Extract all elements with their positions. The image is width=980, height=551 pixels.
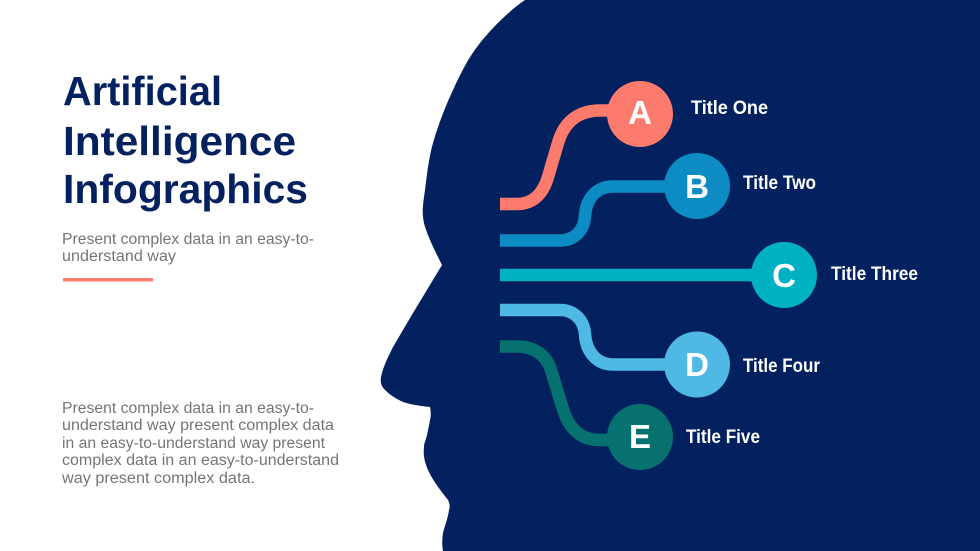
circle B [664,153,730,219]
subtitle text: Present complex data in an easy-to- [62,231,314,248]
body paragraph: understand way present complex data [62,417,334,434]
letter B: B [685,168,709,205]
title: Infographics [63,166,308,212]
accent underline [63,278,153,282]
body paragraph: Present complex data in an easy-to- [62,400,314,417]
letter A: A [628,94,652,131]
connector A [500,110,615,204]
connector D [500,310,675,364]
branch A [500,81,768,204]
label B: Title Two [743,173,816,194]
subtitle text [62,231,314,265]
connector C [500,269,760,281]
body paragraph: way present complex data. [61,470,255,487]
branch E [500,346,760,470]
label C: Title Three [831,264,918,285]
body paragraph [61,400,339,487]
body paragraph: in an easy-to-understand way present [62,435,326,452]
label D: Title Four [743,356,821,377]
letter C: C [772,257,796,294]
letter D: D [685,346,709,383]
title: Intelligence [63,118,296,164]
body paragraph: complex data in an easy-to-understand [62,452,339,469]
subtitle text: understand way [62,248,176,265]
label E: Title Five [686,427,760,448]
circle A [607,81,673,147]
branch D [500,310,821,398]
branch B [500,153,816,240]
head silhouette [381,0,980,551]
letter E: E [629,418,651,455]
connector E [500,346,615,440]
label A: Title One [691,98,768,119]
branch C [500,242,918,308]
title [63,68,308,212]
title: Artificial [63,68,222,114]
circle C [751,242,817,308]
circle D [664,332,730,398]
connector B [500,186,675,240]
circle E [607,404,673,470]
